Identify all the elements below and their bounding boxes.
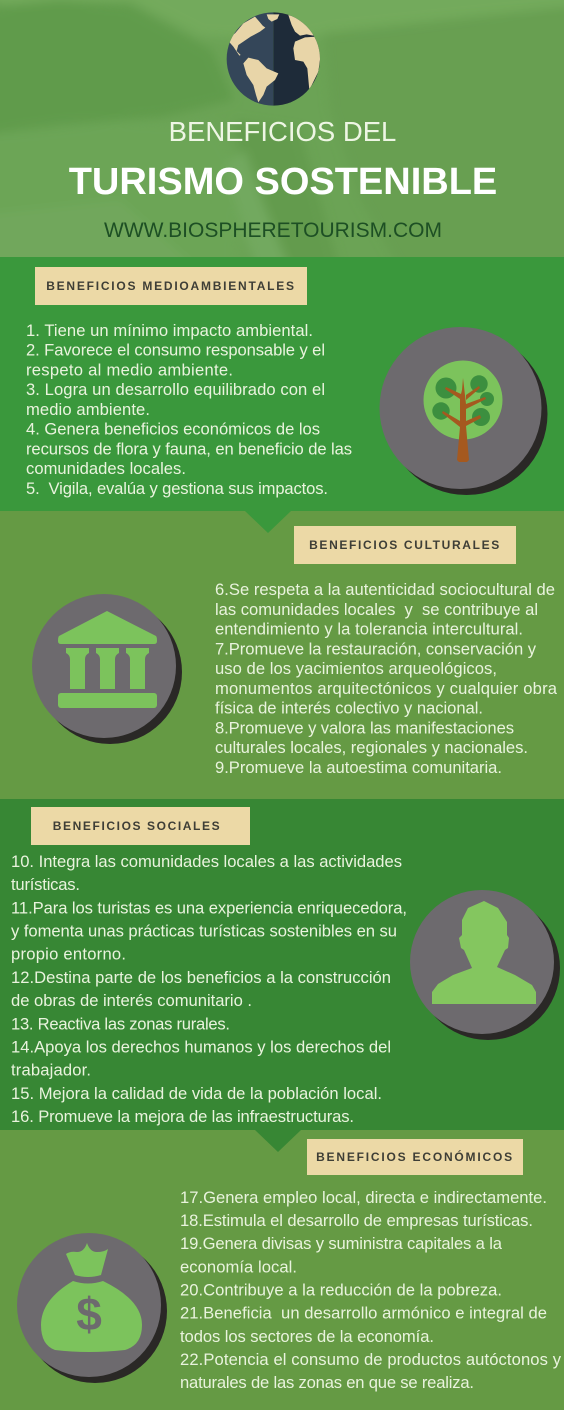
- text: list 1 to 5: 1. Tiene un mínimo impacto ambiental.: [26, 321, 313, 340]
- label: beneficios medioambientales: [35, 267, 307, 305]
- text: list 1 to 5: [26, 321, 352, 498]
- panel: economicos: [0, 1130, 564, 1410]
- label: beneficios economicos: [307, 1139, 523, 1175]
- text: list 10 to 16: turísticas.: [11, 875, 80, 894]
- text: list 1 to 5: respeto al medio ambiente.: [26, 360, 233, 380]
- text: list 17 to 22: 17.Genera empleo local, directa e indirectamente.: [180, 1188, 547, 1207]
- icon: tree: [380, 327, 548, 495]
- text: list 10 to 16: y fomenta unas prácticas turísticas sostenibles en su: [11, 922, 397, 940]
- label: beneficios sociales: BENEFICIOS SOCIALES: [53, 819, 221, 833]
- text: list 6 to 9: uso de los yacimientos arqueológicos,: [215, 659, 497, 678]
- text: list 10 to 16: 16. Promueve la mejora de las infraestructuras.: [11, 1107, 354, 1126]
- text: list 17 to 22: 22.Potencia el consumo de productos autóctonos y: [180, 1350, 562, 1369]
- panel: medioambientales: [0, 257, 564, 511]
- globe icon: [226, 12, 320, 106]
- text: list 10 to 16: de obras de interés comunitario .: [11, 991, 252, 1010]
- text: list 6 to 9: monumentos arquitectónicos y cualquier obra: [215, 679, 558, 698]
- text: list 1 to 5: 3. Logra un desarrollo equilibrado con el: [26, 380, 325, 399]
- text: list 17 to 22: naturales de las zonas en que se realiza.: [180, 1373, 474, 1392]
- header background landscape: [0, 0, 564, 257]
- text: list 17 to 22: [180, 1188, 562, 1392]
- panel: culturales: [0, 511, 564, 799]
- icon: money bag: $: [76, 1288, 102, 1340]
- text: list 6 to 9: las comunidades locales y se contribuye al: [215, 600, 538, 619]
- text: list 6 to 9: 8.Promueve y valora las manifestaciones: [215, 718, 514, 738]
- text: list 1 to 5: 5. Vigila, evalúa y gestiona sus impactos.: [26, 479, 328, 498]
- heading: beneficios del: BENEFICIOS DEL: [169, 116, 396, 147]
- panel: sociales: [0, 799, 564, 1130]
- text: list 17 to 22: todos los sectores de la economía.: [180, 1327, 434, 1346]
- label: beneficios medioambientales: BENEFICIOS MEDIOAMBIENTALES: [46, 279, 296, 293]
- text: list 10 to 16: 10. Integra las comunidades locales a las actividades: [11, 852, 402, 871]
- text: list 1 to 5: recursos de flora y fauna, en beneficio de las: [26, 440, 352, 458]
- text: list 10 to 16: trabajador.: [11, 1061, 91, 1080]
- text: list 1 to 5: medio ambiente.: [26, 400, 150, 419]
- text: list 6 to 9: 7.Promueve la restauración, conservación y: [215, 639, 537, 658]
- text: list 17 to 22: 20.Contribuye a la reducción de la pobreza.: [180, 1280, 502, 1300]
- text: list 17 to 22: 18.Estimula el desarrollo de empresas turísticas.: [180, 1211, 533, 1230]
- arrow: section 3 pointer: [255, 1130, 301, 1152]
- text: list 6 to 9: [215, 580, 558, 777]
- label: beneficios economicos: BENEFICIOS ECONÓMICOS: [316, 1150, 514, 1164]
- heading: turismo sostenible: TURISMO SOSTENIBLE: [69, 161, 497, 203]
- text: list 10 to 16: 12.Destina parte de los beneficios a la construcción: [11, 968, 391, 987]
- label: beneficios culturales: BENEFICIOS CULTURALES: [309, 538, 501, 552]
- arrow: section 1 pointer: [245, 511, 291, 533]
- text: list 1 to 5: 4. Genera beneficios económicos de los: [26, 420, 320, 439]
- text: list 10 to 16: 15. Mejora la calidad de vida de la población local.: [11, 1084, 382, 1103]
- text: list 10 to 16: propio entorno.: [11, 945, 126, 964]
- icon: temple: [32, 594, 182, 744]
- icon: person: [410, 890, 560, 1040]
- text: list 10 to 16: 11.Para los turistas es una experiencia enriquecedora,: [11, 898, 407, 917]
- text: list 10 to 16: 13. Reactiva las zonas rurales.: [11, 1014, 230, 1033]
- text: list 6 to 9: 9.Promueve la autoestima comunitaria.: [215, 758, 502, 777]
- text: list 1 to 5: 2. Favorece el consumo responsable y el: [26, 341, 325, 360]
- text: list 6 to 9: culturales locales, regionales y nacionales.: [215, 738, 528, 757]
- text: list 10 to 16: 14.Apoya los derechos humanos y los derechos del: [11, 1038, 391, 1056]
- label: beneficios culturales: [294, 526, 516, 564]
- text: list 6 to 9: física de interés colectivo y nacional.: [215, 699, 483, 718]
- label: beneficios sociales: [31, 807, 250, 845]
- text: list 17 to 22: 19.Genera divisas y suministra capitales a la: [180, 1234, 503, 1253]
- text: list 17 to 22: economía local.: [180, 1257, 297, 1276]
- text: list 6 to 9: 6.Se respeta a la autenticidad sociocultural de: [215, 580, 555, 599]
- text: list 6 to 9: entendimiento y la tolerancia intercultural.: [215, 620, 523, 639]
- text: list 1 to 5: comunidades locales.: [26, 459, 186, 478]
- text: list 10 to 16: [11, 852, 407, 1126]
- website: WWW.BIOSPHERETOURISM.COM: [104, 219, 442, 242]
- icon: money bag: [17, 1233, 167, 1383]
- text: list 17 to 22: 21.Beneficia un desarrollo armónico e integral de: [180, 1304, 547, 1323]
